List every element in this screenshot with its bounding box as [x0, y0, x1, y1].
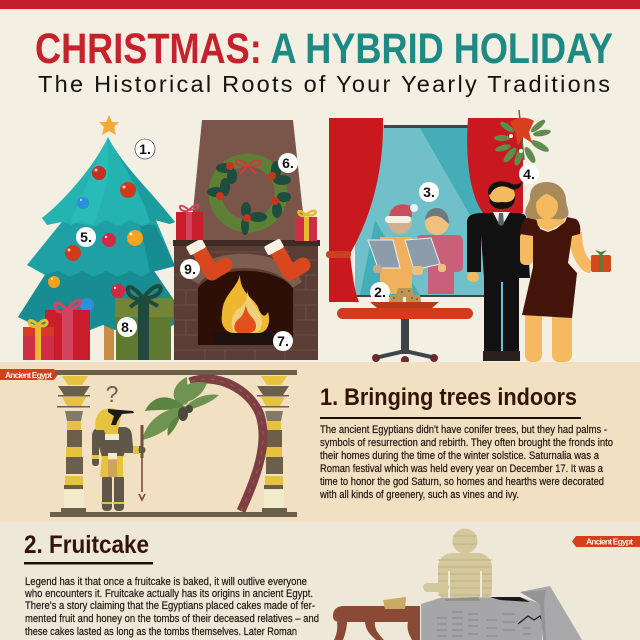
- tomb lid: [520, 586, 582, 640]
- chimney breast: [190, 120, 306, 241]
- text block: section 2: There's a story claiming that the Egyptians placed cakes made of fer-: [25, 600, 315, 612]
- badge 7: [273, 331, 293, 351]
- text block: section 2: these cakes lasted as long as the tombs themselves. Later Roman: [25, 626, 297, 638]
- left curtain: [326, 118, 383, 302]
- badge 6: [278, 153, 298, 173]
- small gold ribbon gift: [23, 327, 54, 360]
- gifts under the tree: [23, 286, 173, 360]
- tag: ancient egypt right: [572, 536, 640, 547]
- left caroler: [380, 237, 412, 294]
- left column: [57, 376, 90, 512]
- window glass: [355, 125, 505, 295]
- red mantel gift: [176, 205, 203, 240]
- question mark: ?: [106, 381, 118, 407]
- badge 5: [76, 227, 96, 247]
- text block: section 2: mented fruit and honey on the tombs of their deceased relatives – and: [25, 613, 319, 625]
- crocodile head: [108, 409, 134, 425]
- wreath: [207, 160, 291, 235]
- badge 2: [370, 282, 390, 302]
- palm tree: [142, 377, 263, 511]
- badge 8: [117, 317, 137, 337]
- brick body: [174, 246, 318, 360]
- egypt scene: [50, 370, 297, 517]
- badge 5: 5.: [80, 229, 92, 245]
- log base: [213, 332, 273, 345]
- cookies: [389, 288, 421, 302]
- small gift in hand: [591, 250, 611, 272]
- badge 9: 9.: [184, 261, 196, 277]
- text block: section 1: time to honor the god Saturn, so homes and hearths were decorated: [320, 476, 604, 488]
- gold ribbon mantel gift: [295, 211, 317, 241]
- illustration: christmas tree: [18, 115, 175, 360]
- badge 7: 7.: [277, 333, 289, 349]
- tree middle tier: [27, 218, 175, 277]
- mummy: [423, 528, 492, 603]
- tag: ancient egypt right: Ancient Egypt: [586, 536, 633, 546]
- badge 4: 4.: [523, 166, 535, 182]
- window scene: [326, 110, 611, 364]
- text block: section 2: [24, 576, 319, 638]
- badge 8: 8.: [121, 319, 133, 335]
- badge 9: [180, 259, 200, 279]
- head dress: [95, 408, 122, 436]
- ornaments: [48, 166, 143, 312]
- staff: [139, 430, 145, 500]
- text block: section 1: The ancient Egyptians didn't have conifer trees, but they had palms -: [320, 424, 607, 436]
- tag: ancient egypt left: Ancient Egypt: [5, 370, 52, 380]
- right curtain: [467, 118, 523, 213]
- badge 6: 6.: [282, 155, 294, 171]
- heading: fruitcake: 2. Fruitcake: [24, 531, 149, 559]
- mummy and tomb: [333, 528, 582, 640]
- text block: section 1: symbols of resurrection and rebirth. They often brought the fronds into: [320, 437, 613, 449]
- badge 1: [135, 139, 155, 159]
- green gift: [115, 298, 173, 317]
- fire: [222, 275, 269, 333]
- tree trunk: [104, 320, 114, 360]
- carolers: [368, 204, 463, 294]
- badge 3: [419, 182, 439, 202]
- woman: [520, 182, 592, 362]
- number badges: [76, 139, 539, 351]
- tree bottom tier: [18, 265, 174, 330]
- skirt: [100, 456, 123, 477]
- badge 4: [519, 164, 539, 184]
- beam: [55, 370, 297, 375]
- sobek figure: [92, 408, 146, 511]
- stocking right: [264, 238, 303, 273]
- star: [99, 115, 119, 135]
- table: [337, 288, 473, 364]
- mantel: [173, 240, 320, 246]
- subtitle: The Historical Roots of Your Yearly Traditions: [38, 71, 610, 97]
- right column: [256, 376, 289, 512]
- badge 1: 1.: [139, 141, 151, 157]
- right caroler: [417, 235, 462, 245]
- stocking left: [186, 238, 225, 273]
- text block: section 1: [319, 424, 613, 501]
- tree top tier: [42, 137, 175, 226]
- text block: section 2: Legend has it that once a fruitcake is baked, it will outlive everyone: [25, 576, 307, 588]
- text block: section 1: with all kinds of greenery, such as vines and ivy.: [319, 489, 519, 501]
- band: section 1 background: [0, 362, 640, 522]
- badge 3: 3.: [423, 184, 435, 200]
- big red gift: [45, 310, 90, 360]
- floor: [50, 512, 297, 517]
- text block: section 1: Roman festival which was held every year on December 17. It was a: [320, 463, 603, 475]
- fireplace: [173, 120, 320, 360]
- top red bar: [0, 0, 640, 9]
- mistletoe: [494, 110, 551, 167]
- fruitcake: [383, 597, 406, 609]
- side table: [333, 606, 420, 640]
- text block: section 2: who encounters it. Fruitcake actually has its origins in ancient Egypt.: [24, 588, 313, 600]
- legs: [102, 475, 112, 511]
- firebox: [198, 271, 293, 345]
- text block: section 1: their homes during the time of the winter solstice. Saturnalia was a: [320, 450, 599, 462]
- song books: [368, 240, 400, 268]
- heading: bringing trees indoors: 1. Bringing trees indoors: [320, 384, 577, 411]
- badge 2: 2.: [374, 284, 386, 300]
- torso and arms: [92, 427, 133, 457]
- man: [467, 181, 530, 361]
- sarcophagus: [421, 597, 542, 640]
- brick arch: [188, 254, 302, 288]
